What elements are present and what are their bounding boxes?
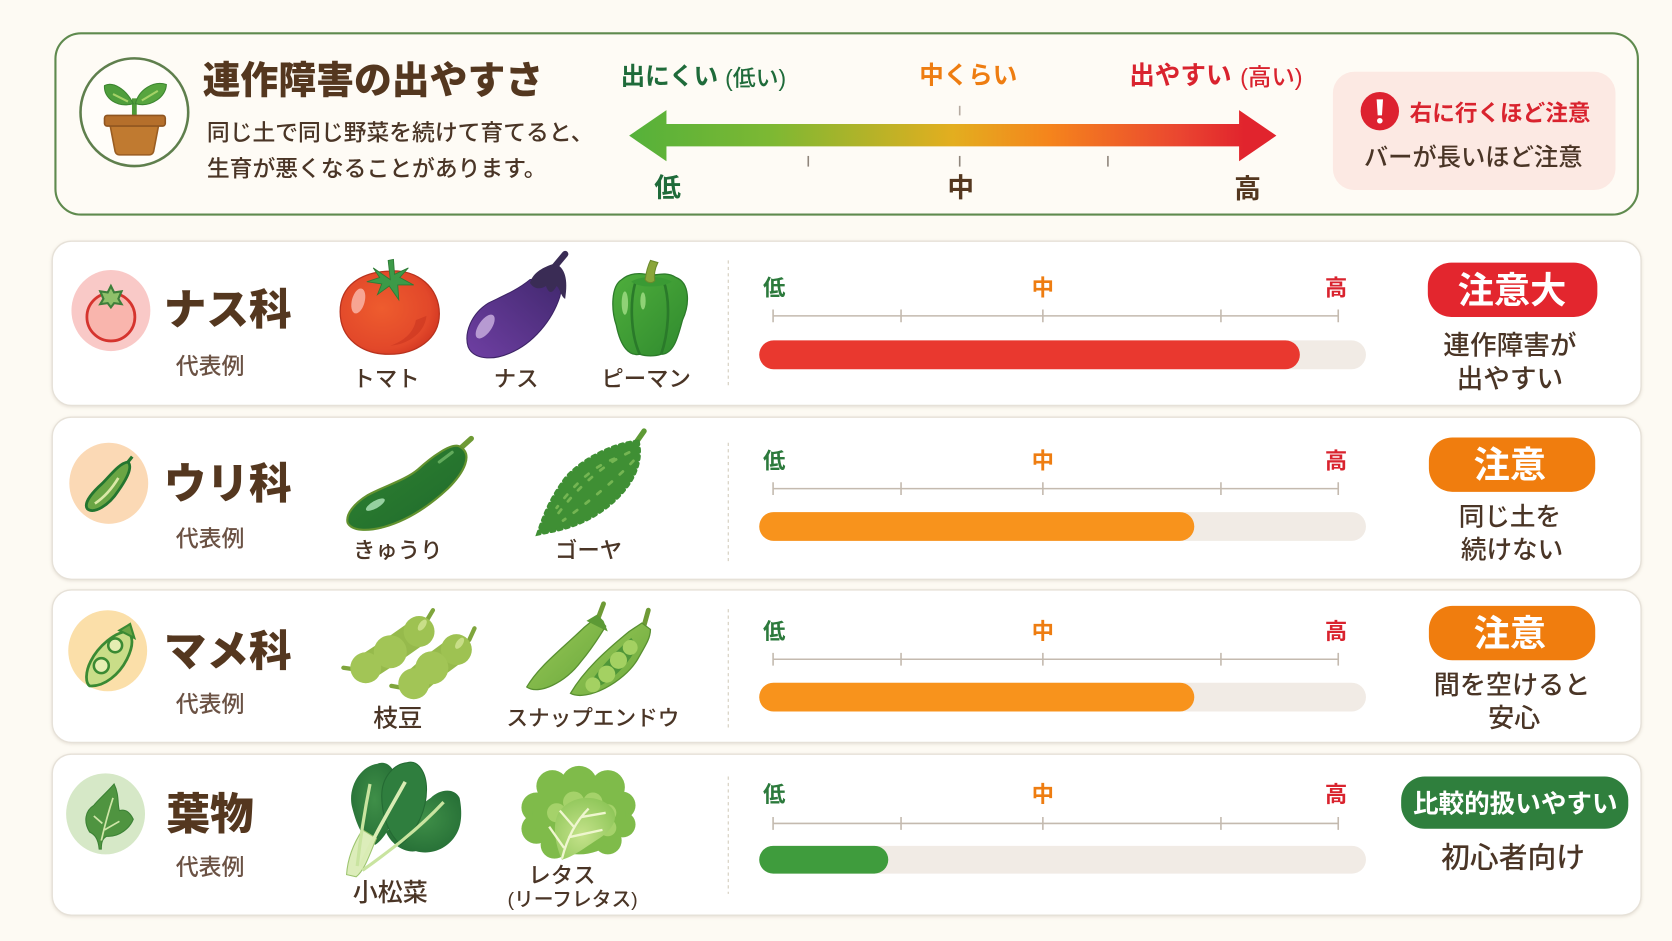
label: mid: 中くらい [919,61,1017,89]
heading: ウリ科 [164,460,292,508]
scale: 高 [1325,782,1347,807]
scale [763,619,1347,666]
axis labels: 高 [1234,174,1261,204]
scale [763,782,1347,830]
title: 連作障害の出やすさ [203,60,543,102]
label: low [621,63,786,91]
label: ピーマン [601,366,691,391]
subheading: 代表例 [176,526,244,552]
scale: 中 [1032,782,1054,807]
badge: 注意 [1474,445,1546,486]
callout: caution note [1333,72,1615,190]
icon: exclamation [1361,92,1399,130]
label: トマト [352,366,420,391]
badge [1401,777,1628,829]
scale: 低 [763,619,786,644]
subheading: 代表例 [176,854,244,880]
label: high [1129,61,1303,90]
scale: 高 [1325,619,1347,644]
icon: leaf [66,773,145,854]
illustration: edamame [343,610,475,699]
note [1434,670,1590,733]
icon: cucumber [69,443,148,524]
callout: caution note: 右に行くほど注意 [1410,101,1590,126]
note: 初心者向け [1441,843,1585,875]
scale: 低 [763,782,786,807]
label: レタス [528,863,596,888]
label: low: (低い) [725,65,786,91]
arrow: risk gradient [629,110,1276,161]
note: 同じ土を [1459,502,1561,531]
scale: 中 [1032,619,1054,644]
panel: ナス科 [52,241,1641,405]
badge: 注意 [1474,613,1546,654]
note: 間を空けると [1434,670,1590,700]
axis labels [654,173,1261,204]
badge [1428,263,1597,317]
illustration: snap peas [527,604,650,695]
scale: 中 [1032,276,1054,301]
note [1459,502,1563,564]
illustration: cucumber [347,439,471,530]
panel: legend header [55,33,1638,215]
note: 安心 [1488,703,1540,733]
label: きゅうり [353,538,442,563]
label: high: (高い) [1240,64,1303,90]
illustration: komatsuna [347,762,461,877]
label: high: 出やすい [1129,61,1232,90]
label: スナップエンドウ [506,705,679,730]
bar: risk level [759,340,1366,369]
bar: risk level [759,512,1366,541]
scale: 中 [1032,448,1054,473]
callout: caution note: バーが長いほど注意 [1364,145,1583,172]
description [207,119,594,182]
subheading: 代表例 [176,353,244,379]
illustration: bitter melon [538,431,644,533]
icon: tomato [71,270,150,351]
badge: 注意大 [1458,270,1566,311]
scale [763,276,1347,322]
label: ゴーヤ [555,538,622,563]
label: (リーフレタス) [507,889,638,911]
heading: ナス科 [164,287,292,335]
icon: sprout in pot [81,58,188,166]
scale: 低 [763,448,786,473]
badge [1429,606,1595,660]
panel: ウリ科 [52,417,1641,579]
bar: risk level [759,846,1366,874]
label: 枝豆 [373,704,422,732]
note [1443,331,1577,394]
panel: 葉物 [52,754,1641,915]
scale: 低 [763,276,786,301]
heading: 葉物 [166,790,254,839]
label: 小松菜 [353,879,428,907]
bar: risk level [759,683,1366,711]
scale: 高 [1325,276,1347,301]
illustration: eggplant [467,254,566,358]
note: 続けない [1461,535,1563,564]
description: 同じ土で同じ野菜を続けて育てると、 [207,119,594,145]
panel: マメ科 [52,590,1641,742]
label [507,863,638,911]
icon: pea pod [68,610,147,691]
note: 連作障害が [1443,331,1577,361]
scale: 高 [1325,448,1347,473]
subheading: 代表例 [176,691,244,717]
illustration: green pepper [613,260,687,356]
badge [1429,437,1595,492]
label: ナス [494,366,538,391]
axis labels: 中 [947,173,974,203]
scale [763,448,1347,495]
illustration: tomato [340,259,439,354]
label: low: 出にくい [621,63,718,91]
heading: マメ科 [164,628,292,676]
axis labels: 低 [654,173,681,203]
note: 出やすい [1457,364,1563,394]
illustration: leaf lettuce [521,766,636,860]
badge: 比較的扱いやすい [1413,789,1618,818]
description: 生育が悪くなることがあります。 [207,156,547,182]
